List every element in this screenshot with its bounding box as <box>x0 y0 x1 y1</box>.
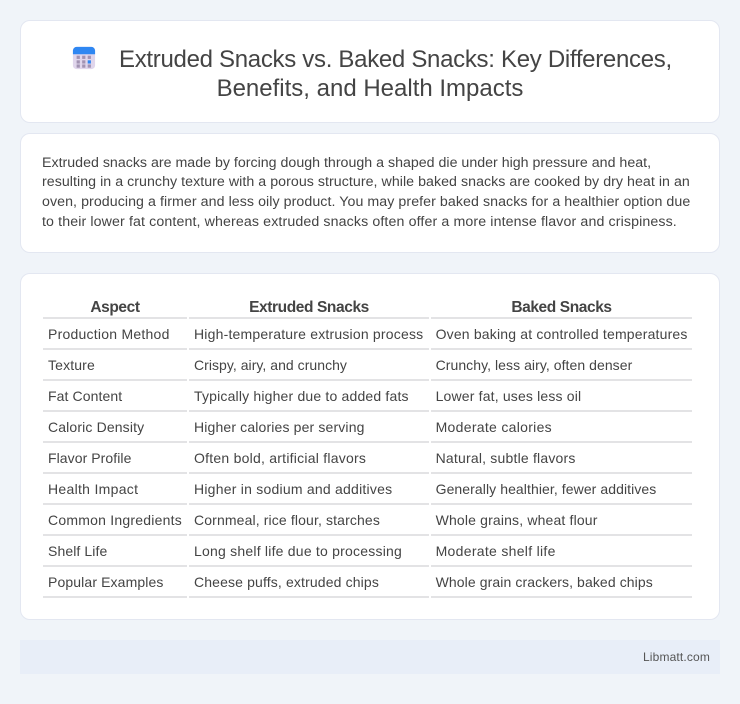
text block: introduction: to their lower fat content, whereas extruded snacks often offer a more intense flavor and crispiness. <box>42 214 677 230</box>
text block: introduction: oven, producing a firmer and less oily product. You may prefer baked snacks for a healthier option due <box>42 194 690 210</box>
footer <box>20 640 720 674</box>
table header: Baked Snacks <box>511 299 612 316</box>
row: Common Ingredients: Whole grains, wheat flour <box>436 512 598 528</box>
text block: introduction: resulting in a crunchy texture with a porous structure, while baked snacks are cooked by dry heat in an <box>42 174 690 190</box>
row: Popular Examples: Cheese puffs, extruded chips <box>194 574 379 590</box>
row: Caloric Density: Higher calories per serving <box>194 419 365 435</box>
row: Fat Content: Lower fat, uses less oil <box>436 388 581 404</box>
row: Common Ingredients: Common Ingredients <box>48 512 182 528</box>
table header <box>90 299 612 316</box>
row: Texture: Crispy, airy, and crunchy <box>194 357 347 373</box>
table header: Aspect <box>90 299 140 316</box>
row: Health Impact: Higher in sodium and additives <box>194 481 392 497</box>
row: Flavor Profile: Often bold, artificial flavors <box>194 450 366 466</box>
row: Production Method: Production Method <box>48 326 170 342</box>
row: Caloric Density: Caloric Density <box>48 419 144 435</box>
text block: introduction: Extruded snacks are made by forcing dough through a shaped die under high pressure and heat, <box>42 154 651 170</box>
row: Shelf Life: Long shelf life due to processing <box>194 543 402 559</box>
row: Production Method <box>43 326 692 350</box>
row: Popular Examples <box>43 574 692 598</box>
row: Production Method: Oven baking at controlled temperatures <box>436 326 688 342</box>
row: Health Impact: Generally healthier, fewer additives <box>436 481 656 497</box>
row: Popular Examples: Whole grain crackers, baked chips <box>436 574 653 590</box>
row: Popular Examples: Popular Examples <box>48 574 164 590</box>
row: Texture: Texture <box>48 357 95 373</box>
table header: Extruded Snacks <box>249 299 369 316</box>
row: Texture: Crunchy, less airy, often denser <box>436 357 632 373</box>
header rules <box>43 317 692 319</box>
row: Health Impact: Health Impact <box>48 481 138 497</box>
title: Extruded Snacks vs. Baked Snacks: Key Differences, <box>119 46 672 73</box>
row: Shelf Life: Shelf Life <box>48 543 107 559</box>
row: Fat Content: Typically higher due to added fats <box>194 388 409 404</box>
row: Fat Content <box>43 388 692 412</box>
row: Texture <box>43 357 692 381</box>
row: Shelf Life: Moderate shelf life <box>436 543 556 559</box>
row: Common Ingredients: Cornmeal, rice flour, starches <box>194 512 380 528</box>
row: Flavor Profile: Natural, subtle flavors <box>436 450 576 466</box>
title: Benefits, and Health Impacts <box>217 75 523 102</box>
row: Health Impact <box>43 481 692 505</box>
row: Fat Content: Fat Content <box>48 388 122 404</box>
footer text: Libmatt.com <box>643 650 710 664</box>
row: Production Method: High-temperature extrusion process <box>194 326 423 342</box>
row: Caloric Density <box>43 419 692 443</box>
panel: comparison table <box>20 273 720 620</box>
panel: introduction <box>20 133 720 253</box>
title <box>119 46 672 102</box>
row: Caloric Density: Moderate calories <box>436 419 552 435</box>
text block: introduction <box>42 154 690 230</box>
icon: calendar <box>72 46 96 70</box>
row: Common Ingredients <box>43 512 692 536</box>
row: Shelf Life <box>43 543 692 567</box>
panel: header <box>20 20 720 123</box>
row: Flavor Profile <box>43 450 692 474</box>
row: Flavor Profile: Flavor Profile <box>48 450 131 466</box>
